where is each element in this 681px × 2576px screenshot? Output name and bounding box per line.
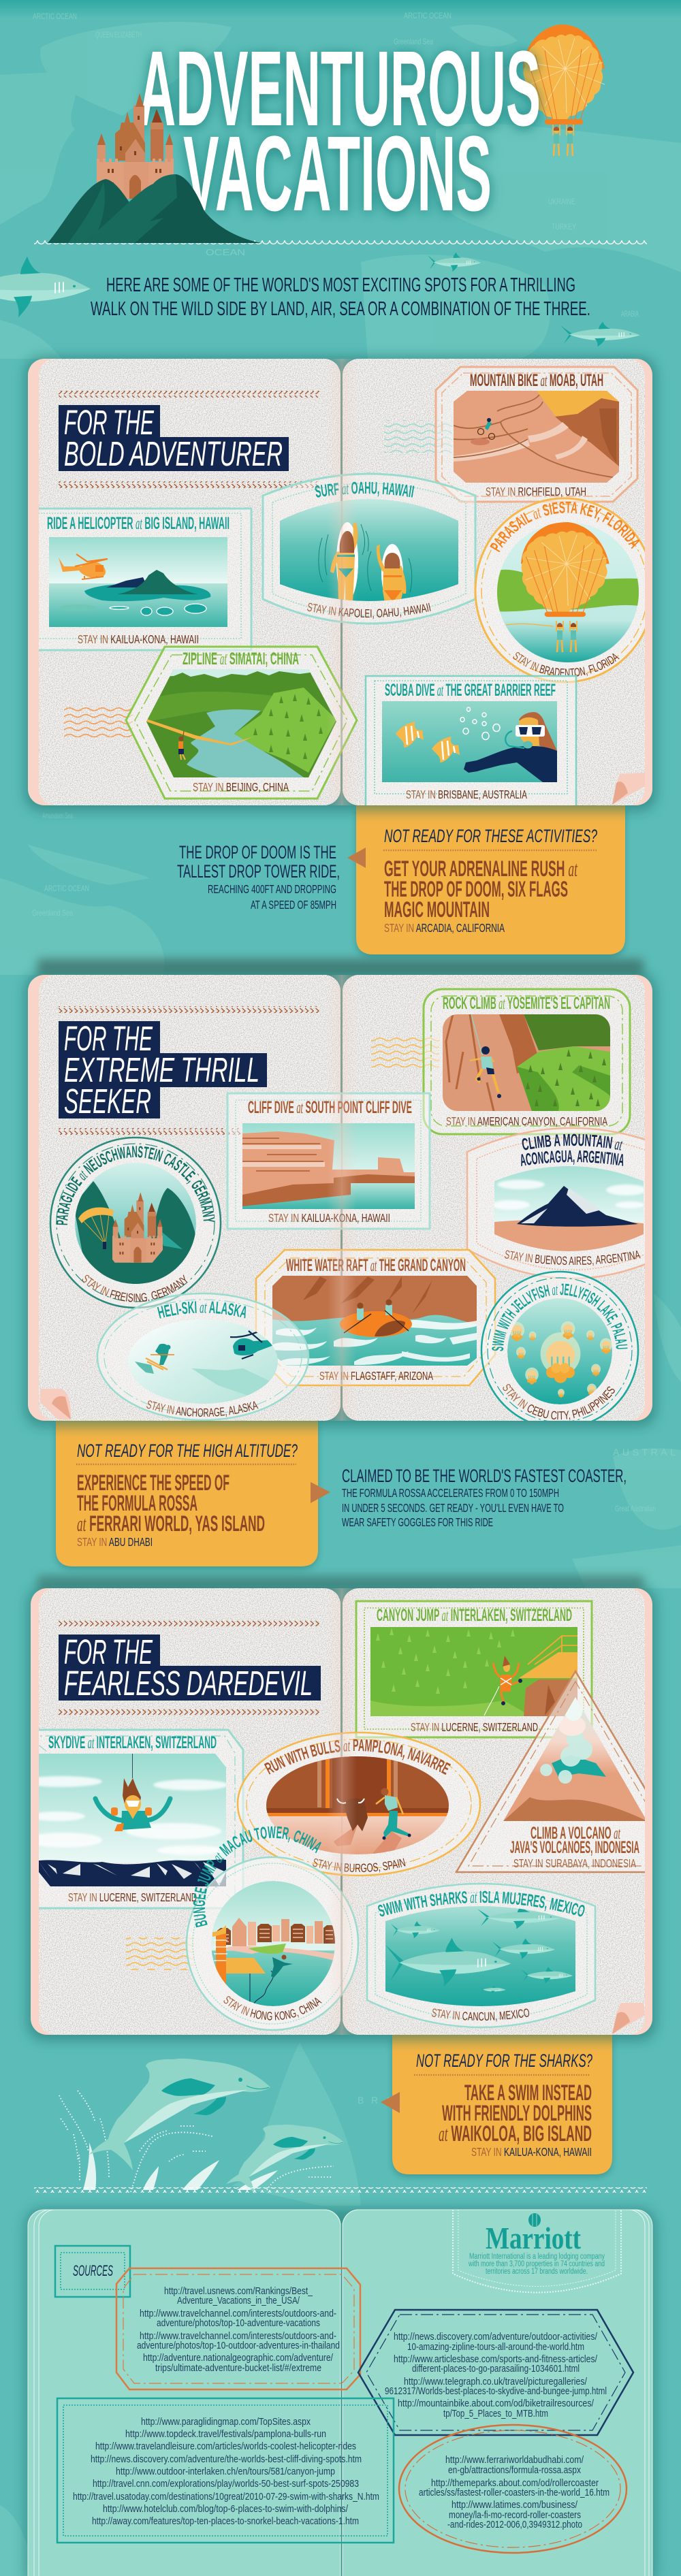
stamp: canyon jump: STAY IN LUCERNE, SWITZERLAND	[411, 1720, 538, 1734]
background: map: ARCTIC OCEAN	[44, 884, 89, 893]
stamp: bungee jump macau: BUNGEE JUMP at MACAU TOWER, CHINA	[190, 1823, 326, 1929]
image: parasail over beach	[497, 521, 639, 662]
sources group 1: Adventure_Vacations_in_the_USA/	[177, 2295, 300, 2306]
sources group 1: http://www.travelchannel.com/interests/outdoors-and-	[140, 2308, 336, 2319]
sources group 1: http://adventure.nationalgeographic.com/adventure/	[143, 2352, 334, 2364]
page curl	[612, 2003, 645, 2034]
divider chevrons top	[59, 1620, 321, 1626]
image: surfers	[280, 499, 458, 602]
badge: marriott: territories across 17 brands worldwide.	[486, 2268, 588, 2276]
stamp: zipline simatai: STAY IN BEIJING, CHINA	[193, 780, 289, 794]
image: skier and helicopter	[128, 1319, 278, 1404]
callout: formula rossa: EXPERIENCE THE SPEED OF	[77, 1470, 229, 1495]
sources group 3: http://www.outdoor-interlaken.ch/en/tours/581/canyon-jump	[116, 2466, 335, 2477]
stamp: paraglide neuschwanstein	[50, 1138, 221, 1308]
page curl	[40, 1389, 71, 1419]
icon: helicopter	[59, 554, 108, 579]
icon: parasail in the sky	[523, 25, 605, 156]
illustration: leaping dolphins	[59, 2059, 344, 2194]
callout: drop of doom	[356, 805, 625, 957]
image: biker on trail	[454, 391, 619, 483]
callout: drop of doom: STAY IN ARCADIA, CALIFORNIA	[384, 921, 505, 935]
stamp: run with bulls	[238, 1733, 480, 1875]
image: bungee jumper	[211, 1881, 335, 2006]
image: zipline over lake	[146, 669, 336, 777]
icon: paraglider	[78, 1208, 114, 1249]
sources group 4: http://www.ferrariworldabudhabi.com/	[445, 2454, 584, 2466]
stamp: cliff dive	[227, 1093, 430, 1229]
image: canyon jumper	[370, 1627, 577, 1716]
heading: for the fearless daredevil	[59, 1632, 321, 1703]
divider chevrons top	[59, 391, 321, 398]
stamp: zipline simatai	[126, 647, 357, 799]
sources group 2: http://www.articlesbase.com/sports-and-fitness-articles/	[394, 2353, 598, 2365]
text: formula rossa fact: WEAR SAFETY GOGGLES FOR THIS RIDE	[342, 1515, 493, 1529]
panel: book 1 for the bold adventurer	[19, 350, 662, 820]
callout: drop of doom: MAGIC MOUNTAIN	[384, 897, 490, 922]
stamp: surf oahu: STAY IN KAPOLEI, OAHU, HAWAII	[307, 603, 430, 619]
bottom wave line	[34, 2187, 647, 2193]
sources group 2	[358, 2310, 633, 2435]
background: map: ARCTIC OCEAN	[404, 11, 452, 20]
stamp: cliff dive: STAY IN KAILUA-KONA, HAWAII	[268, 1211, 390, 1225]
label: sources: SOURCES	[73, 2262, 113, 2279]
stamp: swim with sharks: STAY IN CANCUN, MEXICO	[430, 2006, 530, 2023]
image: volcano	[503, 1696, 647, 1821]
stamp: swim with sharks: SWIM WITH SHARKS at ISLA MUJERES, MEXICO	[376, 1888, 587, 1921]
stamp: rock climb el capitan	[424, 989, 630, 1134]
stamp: skydive interlaken	[20, 1730, 243, 1908]
stamp: paraglide neuschwanstein: STAY IN FREISING, GERMANY	[82, 1274, 188, 1302]
badge: marriott: Marriott International is a leading lodging company	[469, 2253, 605, 2261]
image: skydiver	[20, 1754, 228, 1886]
page crease	[327, 359, 357, 805]
badge: marriott	[453, 2210, 621, 2293]
stamp: white water raft: WHITE WATER RAFT at THE GRAND CANYON	[286, 1256, 466, 1275]
panel: sources book	[25, 2208, 656, 2576]
stamp: swim with sharks	[367, 1884, 595, 2027]
image: helicopter and island	[49, 537, 227, 627]
intro text	[91, 274, 590, 320]
sources group 2: tp/Top_5_Places_to_MTB.htm	[443, 2408, 548, 2419]
label: sources	[55, 2246, 130, 2297]
panel: book 3 for the fearless daredevil	[20, 1586, 681, 2041]
stamp: helicopter big island	[27, 509, 251, 650]
heading: for the bold adventurer: FOR THE	[64, 403, 155, 442]
icon: small shark right	[560, 322, 640, 347]
background: map: ARABIA	[621, 309, 639, 319]
stamp: parasail siesta key: PARASAIL at SIESTA KEY, FLORIDA	[490, 501, 640, 553]
arrow: callout 2	[311, 1482, 330, 1503]
heading: for the extreme thrill seeker: EXTREME THRILL	[64, 1050, 259, 1089]
divider chevrons top	[59, 1006, 321, 1013]
sources group 4: http://www.latimes.com/business/	[452, 2499, 578, 2511]
panel: book 2 for the extreme thrill seeker	[19, 968, 663, 1436]
stamp: helicopter big island: RIDE A HELICOPTER at BIG ISLAND, HAWAII	[47, 514, 229, 533]
stamp: surf oahu	[262, 472, 477, 625]
stamp: heli-ski alaska: STAY IN ANCHORAGE, ALASKA	[146, 1400, 259, 1417]
stamp: climb aconcagua	[467, 1128, 677, 1278]
text: drop of doom fact: AT A SPEED OF 85MPH	[251, 898, 336, 912]
icon: castle on mountains	[48, 93, 261, 243]
sources group 2: http://www.telegraph.co.uk/travel/picturegalleries/	[404, 2376, 588, 2387]
arrow: callout 3	[381, 2092, 400, 2113]
background: map: Amundsen Sea	[42, 811, 73, 820]
stamp: helicopter big island: STAY IN KAILUA-KONA, HAWAII	[78, 632, 199, 646]
background: map: ARCTIC OCEAN	[33, 12, 77, 21]
image: paraglider and castle	[74, 1163, 197, 1287]
stamp: mountain bike	[436, 367, 637, 502]
text: formula rossa fact	[342, 1466, 627, 1529]
sources group 4: http://themeparks.about.com/od/rollercoaster	[431, 2477, 599, 2489]
image: rock climber	[443, 1014, 610, 1111]
divider chevrons bottom	[59, 1709, 321, 1716]
icon: small shark centre	[428, 253, 481, 272]
icon: shark left	[0, 256, 91, 317]
stamp: white water raft	[256, 1250, 495, 1385]
sources group 1: adventure/photos/top-10-outdoor-adventures-in-thailand	[137, 2340, 340, 2351]
badge: marriott: Marriott	[486, 2221, 582, 2255]
heading: for the fearless daredevil: FOR THE	[64, 1632, 153, 1671]
stamp: climb aconcagua: STAY IN BUENOS AIRES, ARGENTINA	[505, 1250, 641, 1266]
sources group 1: adventure/photos/top-10-adventure-vacations	[157, 2317, 320, 2329]
stamp: climb aconcagua: CLIMB A MOUNTAIN at	[522, 1134, 622, 1150]
sources group 2: http://news.discovery.com/adventure/outdoor-activities/	[394, 2331, 598, 2342]
heading: for the bold adventurer: BOLD ADVENTURER	[64, 434, 283, 473]
divider chevrons bottom	[59, 1128, 241, 1135]
heading: for the extreme thrill seeker: FOR THE	[64, 1019, 153, 1058]
sources group 1: trips/ultimate-adventure-bucket-list/#/extreme	[155, 2362, 321, 2374]
sources group 4: articles/ss/fastest-roller-coasters-in-the-world_16.htm	[419, 2487, 609, 2498]
badge: marriott: with more than 3,700 properties in 74 countries and	[468, 2260, 605, 2268]
callout: dolphins	[392, 2035, 612, 2177]
divider chevrons bottom	[59, 481, 321, 488]
sources group 3: http://travel.usatoday.com/destinations/10great/2010-07-29-swim-with-sharks_N.htm	[73, 2491, 379, 2502]
sources group 4: -and-rides-2012-006,0,3949312.photo	[447, 2519, 582, 2530]
sources group 3: http://away.com/features/top-ten-places-to-snorkel-beach-vacations-1.htm	[92, 2515, 359, 2527]
heading: for the fearless daredevil: FEARLESS DAREDEVIL	[64, 1664, 313, 1703]
background: map: AUSTRAL	[613, 1447, 676, 1458]
page curl	[612, 773, 645, 805]
callout: formula rossa: at FERRARI WORLD, YAS ISLAND	[77, 1511, 265, 1536]
image: raft on rapids	[272, 1276, 477, 1366]
background: map: TURKEY	[552, 222, 576, 231]
text: drop of doom fact: REACHING 400FT AND DROPPING	[208, 882, 336, 896]
background: map: QUEEN ELIZABETH	[95, 30, 142, 39]
text: formula rossa fact: IN UNDER 5 SECONDS. GET READY - YOU'LL EVEN HAVE TO	[342, 1501, 564, 1515]
stamp: scuba great barrier reef	[366, 676, 576, 816]
stamp: bungee jump macau: STAY IN HONG KONG, CHINA	[221, 1993, 323, 2023]
stamp: scuba great barrier reef: STAY IN BRISBANE, AUSTRALIA	[406, 788, 527, 801]
stamp: skydive interlaken: SKYDIVE at INTERLAKEN, SWITZERLAND	[48, 1733, 217, 1752]
image: bull run	[266, 1756, 449, 1856]
background: map: Greenland Sea	[394, 37, 433, 46]
sources group 4	[399, 2425, 627, 2553]
heading: for the extreme thrill seeker: SEEKER	[64, 1082, 151, 1121]
wave marks yellow	[126, 1937, 194, 1970]
image: jellyfish	[507, 1298, 612, 1404]
stamp: climb a volcano: STAY IN SURABAYA, INDONESIA	[513, 1856, 636, 1870]
dolphin large	[89, 2059, 270, 2170]
text: drop of doom fact: TALLEST DROP TOWER RIDE,	[177, 861, 340, 882]
background: map: Greenland Sea	[32, 908, 73, 918]
dolphin small	[226, 2125, 344, 2194]
top wave line	[34, 240, 647, 246]
stamp: surf oahu: SURF at OAHU, HAWAII	[315, 482, 414, 498]
sources group 2: http://mountainbike.about.com/od/biketrailresources/	[398, 2398, 595, 2409]
sources group 1	[116, 2268, 360, 2389]
sources group 1: http://www.travelchannel.com/interests/outdoors-and-	[140, 2330, 336, 2342]
sources group 4: money/la-fi-mo-record-roller-coasters	[449, 2509, 581, 2521]
stamp: heli-ski alaska	[97, 1293, 308, 1420]
title	[138, 29, 541, 234]
stamp: paraglide neuschwanstein: PARAGLIDE at NEUSCHWANSTEIN CASTLE, GERMANY	[56, 1146, 215, 1225]
callout: formula rossa: NOT READY FOR THE HIGH ALTITUDE?	[77, 1440, 298, 1461]
stamp: parasail siesta key	[474, 497, 645, 683]
sources group 3: http://www.hotelclub.com/blog/top-6-places-to-swim-with-dolphins/	[103, 2503, 349, 2515]
sources group 2: 10-amazing-zipline-tours-all-around-the-world.htm	[407, 2341, 584, 2353]
sources group 3: http://news.discovery.com/adventure/the-worlds-best-cliff-diving-spots.htm	[91, 2453, 362, 2465]
callout: formula rossa: THE FORMULA ROSSA	[77, 1491, 197, 1515]
callout: formula rossa	[56, 1421, 318, 1569]
arrow: callout 1	[347, 848, 366, 868]
sources group 2: 9612317/Worlds-best-places-to-skydive-and-bungee-jump.html	[385, 2385, 607, 2397]
sources group 3: http://www.paraglidingmap.com/TopSites.aspx	[141, 2416, 311, 2428]
stamp: climb aconcagua: ACONCAGUA, ARGENTINA	[521, 1150, 624, 1166]
stamp: scuba great barrier reef: SCUBA DIVE at THE GREAT BARRIER REEF	[385, 681, 556, 700]
sources group 2: different-places-to-go-parasailing-1034601.html	[412, 2363, 580, 2374]
stamp: skydive interlaken: STAY IN LUCERNE, SWITZERLAND	[68, 1890, 197, 1904]
stamp: parasail siesta key: STAY IN BRADENTON, FLORIDA	[513, 652, 620, 677]
wave marks orange	[64, 705, 133, 737]
stamp: jellyfish lake palau: SWIM WITH JELLYFISH at JELLYFISH LAKE, PALAU	[492, 1284, 628, 1351]
callout: dolphins: STAY IN KAILUA-KONA, HAWAII	[471, 2145, 592, 2159]
background: map: Great Australian	[615, 1504, 656, 1513]
sources group 3	[57, 2398, 394, 2543]
wave marks teal	[384, 420, 452, 453]
stamp: run with bulls: STAY IN BURGOS, SPAIN	[311, 1855, 407, 1875]
water splashes	[59, 2091, 334, 2192]
stamp: run with bulls: RUN WITH BULLS at PAMPLONA, NAVARRE	[264, 1739, 451, 1775]
stamp: jellyfish lake palau	[481, 1272, 638, 1428]
image: scuba diver and fish	[382, 701, 557, 782]
stamp: cliff dive: CLIFF DIVE at SOUTH POINT CLIFF DIVE	[248, 1098, 412, 1117]
wave marks yellow	[371, 1035, 439, 1067]
page crease	[327, 975, 357, 1421]
sources group 3: http://www.travelandleisure.com/articles/worlds-coolest-helicopter-rides	[95, 2441, 356, 2452]
stamp: zipline simatai: ZIPLINE at SIMATAI, CHINA	[183, 649, 299, 669]
stamp: rock climb el capitan: STAY IN AMERICAN CANYON, CALIFORNIA	[446, 1114, 607, 1128]
text: drop of doom fact	[177, 842, 340, 912]
sources group 3: http://www.topdeck.travel/festivals/pamplona-bulls-run	[125, 2428, 326, 2440]
stamp: climb a volcano	[456, 1671, 681, 1872]
callout: formula rossa: STAY IN ABU DHABI	[77, 1535, 153, 1549]
sources group 1: http://travel.usnews.com/Rankings/Best_	[164, 2285, 313, 2297]
page crease	[327, 1588, 357, 2035]
stamp: heli-ski alaska: HELI-SKI at ALASKA	[157, 1302, 247, 1319]
text: formula rossa fact: THE FORMULA ROSSA ACCELERATES FROM 0 TO 150MPH	[342, 1486, 559, 1500]
image: sharks	[385, 1893, 575, 2008]
sources group 4: en-gb/attractions/formula-rossa.aspx	[448, 2464, 581, 2476]
background: map: OCEAN	[206, 247, 245, 257]
heading: for the bold adventurer	[59, 403, 289, 473]
image: snowy mountain	[492, 1157, 647, 1253]
stamp: white water raft: STAY IN FLAGSTAFF, ARIZONA	[319, 1369, 433, 1383]
stamp: mountain bike: MOUNTAIN BIKE at MOAB, UTAH	[470, 371, 603, 390]
icon: teal helicopter	[230, 1331, 274, 1359]
text: drop of doom fact: THE DROP OF DOOM IS THE	[179, 842, 336, 863]
image: cliffs	[242, 1123, 415, 1209]
stamp: bungee jump macau	[187, 1823, 358, 2030]
stamp: mountain bike: STAY IN RICHFIELD, UTAH	[486, 485, 586, 498]
stamp: jellyfish lake palau: STAY IN CEBU CITY, PHILIPPINES	[503, 1384, 615, 1420]
sources group 3: http://travel.cnn.com/explorations/play/worlds-50-best-surf-spots-250983	[93, 2478, 359, 2490]
heading: for the extreme thrill seeker	[59, 1019, 267, 1121]
background: map: UKRAINE	[548, 197, 575, 206]
background: map: BRA	[358, 2095, 392, 2106]
stamp: canyon jump	[356, 1601, 592, 1737]
